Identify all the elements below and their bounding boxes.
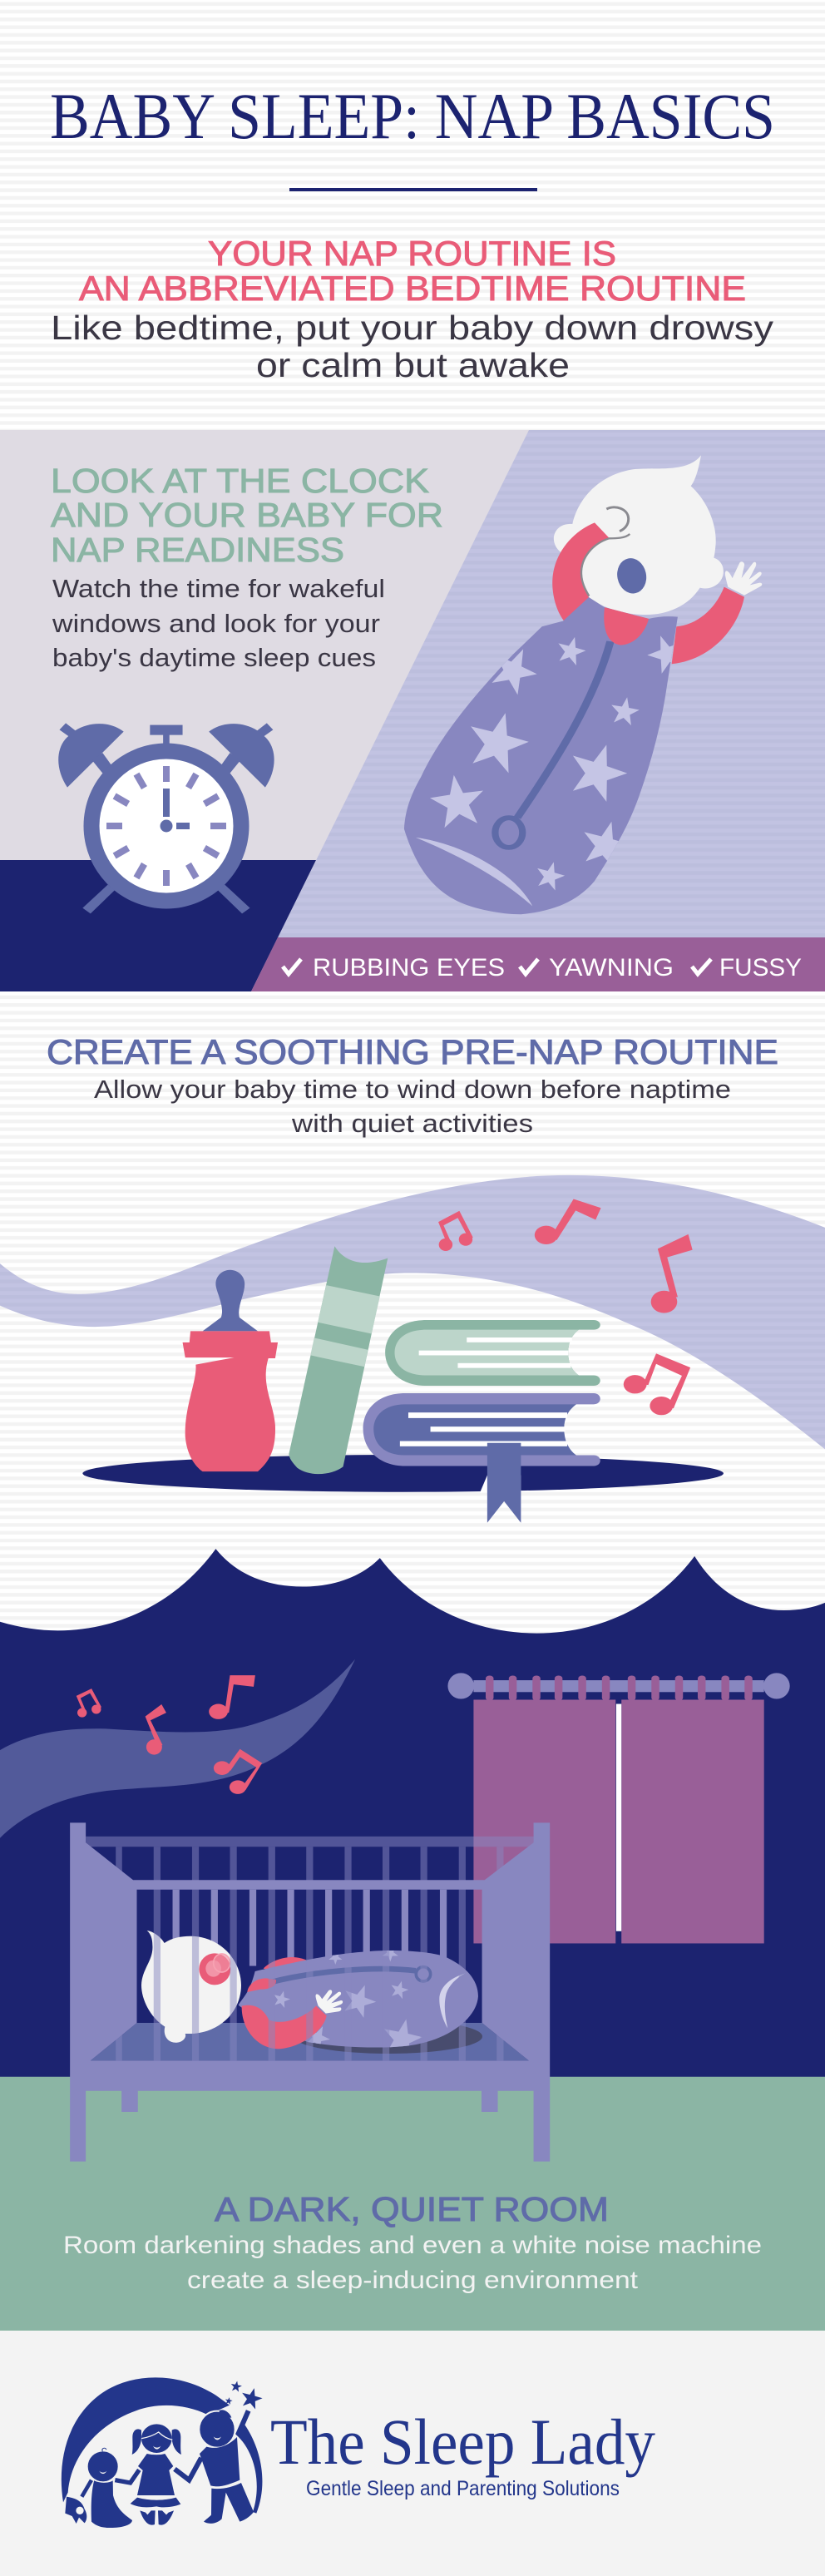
icon: music notes [438,1199,693,1415]
illustration: sleeping baby [141,1931,482,2059]
logo: family under arch [62,2377,264,2528]
heading: abbreviated routine [79,234,746,308]
icon: bottle [183,1270,278,1471]
music wave [0,1175,825,1449]
heading: look at the clock: AND YOUR BABY FOR [51,496,443,534]
text: wind down: Allow your baby time to wind down before naptime [94,1075,731,1104]
logo wordmark: The Sleep Lady [270,2405,655,2478]
icon: music notes [77,1675,262,1794]
icon: alarm clock [58,723,274,913]
checklist: sleep cues: YAWNING [549,954,674,981]
text: wakeful windows: Watch the time for wakeful [52,574,385,603]
text: drowsy but awake: Like bedtime, put your baby down drowsy [51,309,774,347]
panel: nap readiness [0,430,825,991]
text: wind down: with quiet activities [291,1109,533,1138]
text: drowsy but awake [51,309,774,384]
checklist: sleep cues [283,954,802,981]
text: drowsy but awake: or calm but awake [256,346,570,384]
curtains [447,1673,790,1943]
text: wakeful windows [52,574,385,672]
heading: look at the clock [51,462,443,569]
checklist: sleep cues: FUSSY [719,954,802,981]
illustration: yawning baby in sleep sack [404,455,762,914]
heading: pre-nap routine: CREATE A SOOTHING PRE-NAP ROUTINE [47,1032,778,1071]
text: wakeful windows: baby's daytime sleep cues [52,643,376,672]
heading: abbreviated routine: AN ABBREVIATED BEDTIME ROUTINE [79,269,746,308]
heading: abbreviated routine: YOUR NAP ROUTINE IS [208,234,616,273]
text: sleep-inducing environment: Room darkening shades and even a white noise machine [63,2232,762,2259]
panel: footer [0,2331,825,2576]
panel: dark quiet room [0,1549,825,2331]
illustration: crib [70,1822,550,2162]
heading: look at the clock: LOOK AT THE CLOCK [51,462,429,500]
title: BABY SLEEP: NAP BASICS [50,80,775,152]
text: wakeful windows: windows and look for your [52,609,380,638]
crib back [91,1890,529,2060]
text: wind down [94,1075,731,1138]
text: sleep-inducing environment [63,2232,762,2294]
icon: green book [385,1320,600,1386]
music wave [0,1659,355,1838]
text: sleep-inducing environment: create a sleep-inducing environment [187,2267,639,2294]
shadow [82,1455,724,1493]
heading: look at the clock: NAP READINESS [51,531,344,569]
checklist: sleep cues: RUBBING EYES [313,954,505,981]
logo tagline: Gentle Sleep and Parenting Solutions [306,2477,620,2500]
icon: upright book [289,1246,388,1474]
icon: purple book [363,1393,600,1523]
night wall with scalloped clouds [0,1549,825,2077]
illustration: pre-nap items [0,1175,825,1523]
heading: dark quiet room: A DARK, QUIET ROOM [215,2190,609,2228]
